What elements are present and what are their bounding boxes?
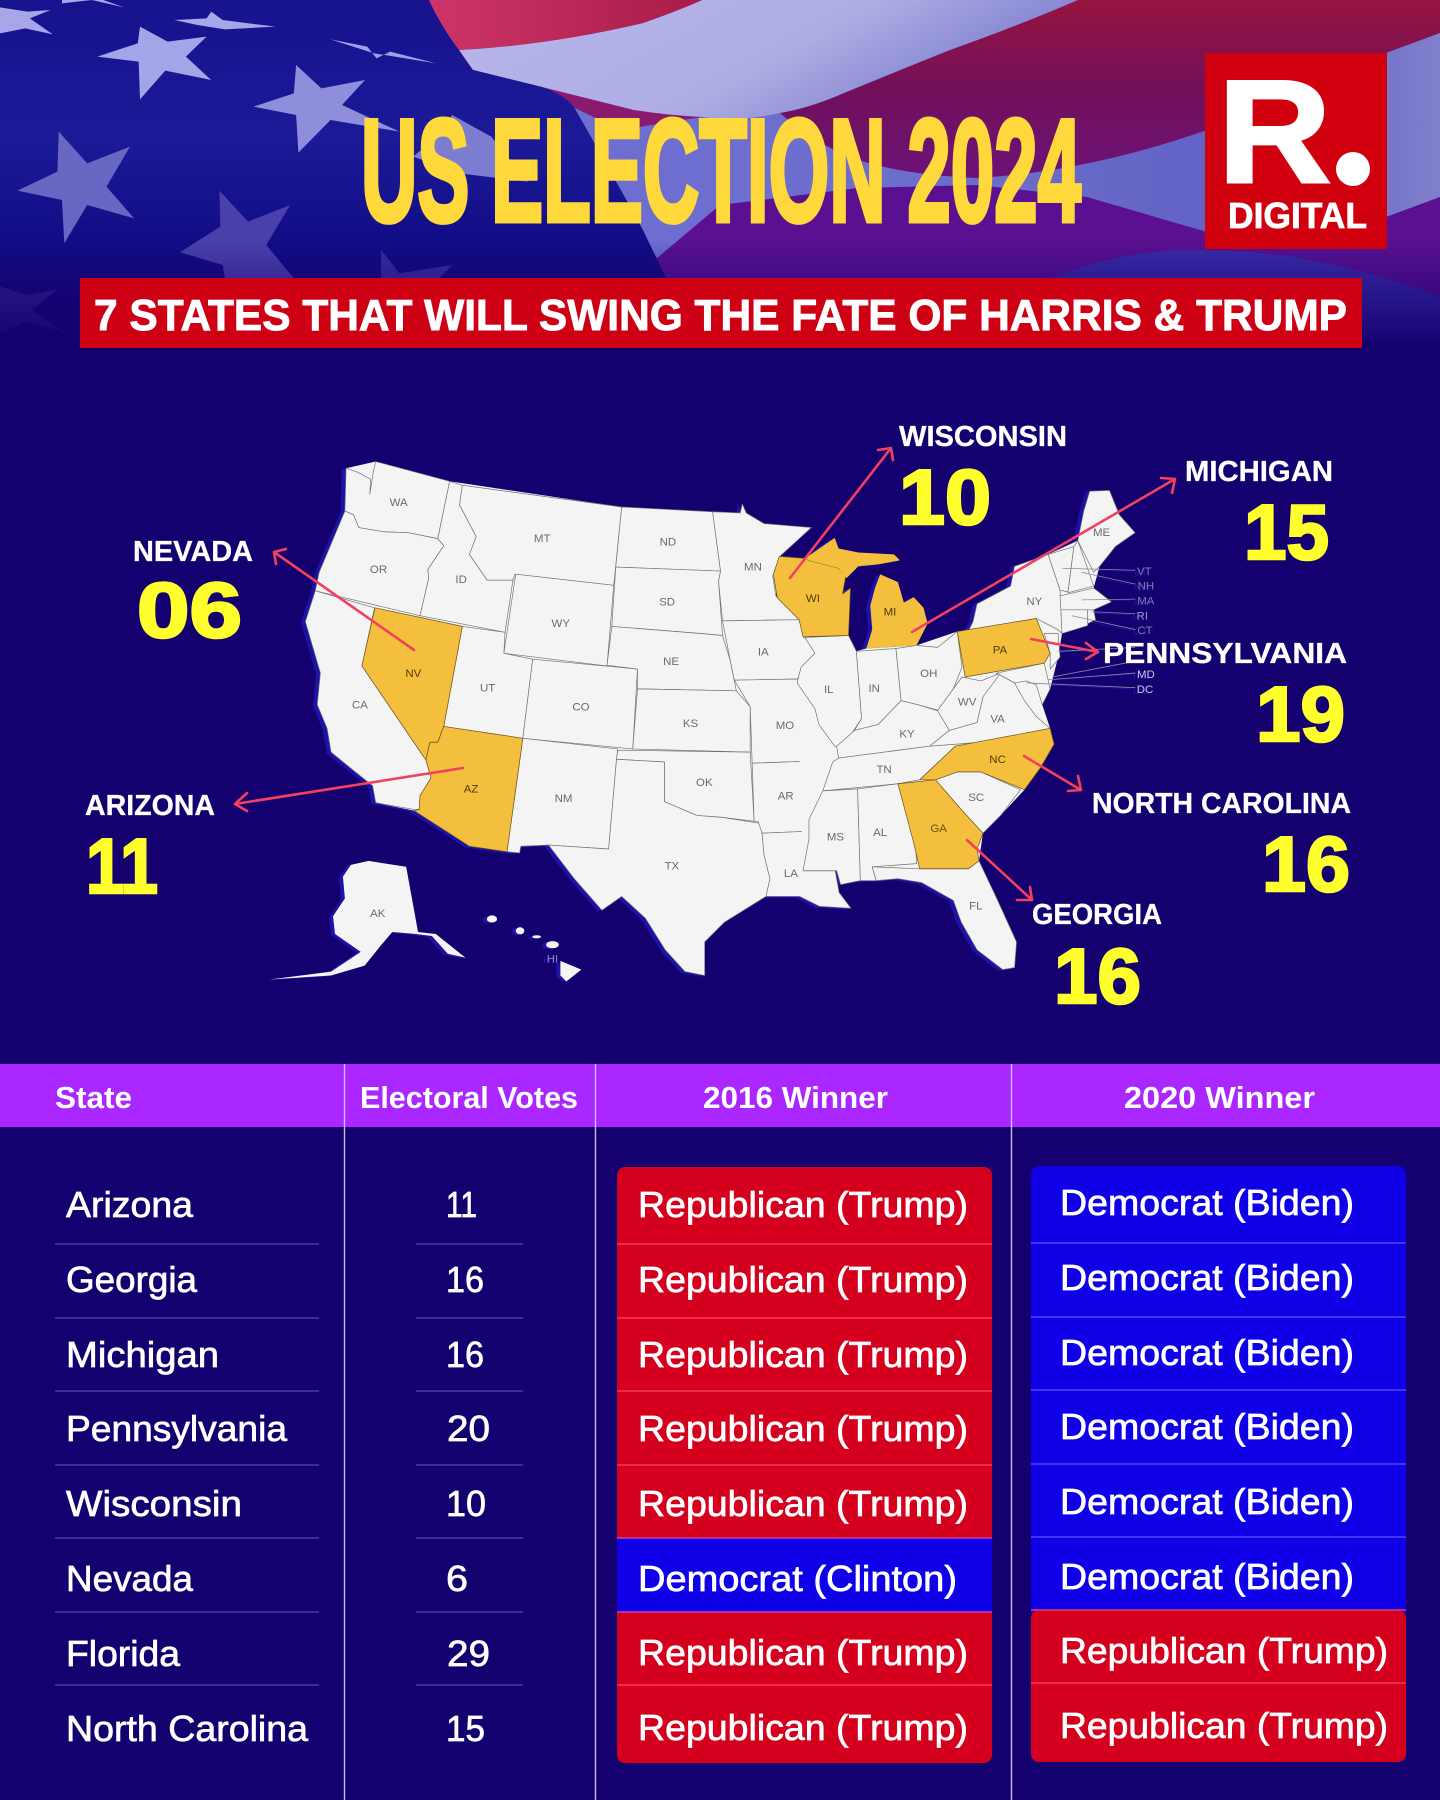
row: North Carolina xyxy=(66,1705,1388,1749)
western state abbreviations: MN xyxy=(744,561,762,573)
callout: Nevada xyxy=(133,536,253,654)
flag banner background xyxy=(0,0,1440,352)
column lines xyxy=(344,1064,1012,1800)
swing state: Arizona xyxy=(414,726,523,852)
callout: Michigan xyxy=(1185,456,1333,576)
arrow: Nevada xyxy=(274,549,414,650)
western state abbreviations: OK xyxy=(696,777,713,789)
row: Michigan xyxy=(66,1332,1354,1375)
eastern state abbreviations: AL xyxy=(873,827,887,839)
US map xyxy=(270,462,1155,981)
row: Michigan: Democrat (Biden) xyxy=(1060,1332,1354,1373)
table xyxy=(0,1064,1440,1800)
swing state: Michigan xyxy=(805,538,928,649)
western state abbreviations: MO xyxy=(776,720,794,732)
canton with stars xyxy=(0,0,680,345)
row: Florida xyxy=(66,1630,1388,1674)
swing state: Nevada xyxy=(362,608,462,760)
western state abbreviations: CA xyxy=(352,700,368,712)
western state abbreviations: WA xyxy=(390,497,408,509)
2016 winner blocks xyxy=(617,1167,992,1763)
row: Wisconsin: Democrat (Biden) xyxy=(1060,1481,1354,1522)
western state abbreviations: WY xyxy=(552,618,570,630)
row: Wisconsin xyxy=(66,1481,1354,1524)
logo: R. Digital: R xyxy=(1218,50,1331,213)
swing state: Georgia xyxy=(898,780,983,869)
row: Arizona: Democrat (Biden) xyxy=(1060,1182,1354,1223)
row: Georgia: Democrat (Biden) xyxy=(1060,1257,1354,1298)
callout: Wisconsin xyxy=(899,421,1067,541)
logo: R. Digital: DIGITAL xyxy=(1228,195,1367,236)
eastern state abbreviations: MD xyxy=(1137,669,1155,681)
row: Pennsylvania: Republican (Trump) xyxy=(638,1408,968,1449)
callout: North Carolina xyxy=(1092,788,1351,908)
callout: Arizona xyxy=(85,790,215,910)
Hawaii xyxy=(487,915,581,981)
row: Florida: Republican (Trump) xyxy=(1060,1630,1388,1671)
callout: Arizona: ARIZONA xyxy=(85,790,215,822)
western state abbreviations: MT xyxy=(534,533,550,545)
eastern state abbreviations: SC xyxy=(968,792,984,804)
row: North Carolina: Republican (Trump) xyxy=(1060,1705,1388,1746)
row: Georgia: 16 xyxy=(446,1259,484,1300)
western state abbreviations: OR xyxy=(370,564,387,576)
row: Georgia: Georgia xyxy=(66,1259,198,1300)
row: Wisconsin: Wisconsin xyxy=(66,1483,242,1524)
row: North Carolina: Republican (Trump) xyxy=(638,1707,968,1748)
eastern state abbreviations: MI xyxy=(884,607,896,619)
arrow: Arizona xyxy=(235,768,463,811)
arrow: Wisconsin xyxy=(790,448,893,578)
eastern state abbreviations: MS xyxy=(827,831,844,843)
callout: Michigan: MICHIGAN xyxy=(1185,456,1333,488)
table header bar: 2020 Winner xyxy=(1124,1080,1315,1115)
row: Arizona: 11 xyxy=(446,1184,477,1225)
eastern state abbreviations: NH xyxy=(1138,581,1154,593)
logo: R. Digital xyxy=(1205,50,1387,249)
western state abbreviations xyxy=(352,497,798,965)
row: Georgia: Republican (Trump) xyxy=(638,1259,968,1300)
eastern state abbreviations: TN xyxy=(876,764,892,776)
table header bar: 2016 Winner xyxy=(703,1080,888,1115)
eastern state abbreviations: DC xyxy=(1137,684,1153,696)
row: Wisconsin: Republican (Trump) xyxy=(638,1483,968,1524)
row: Arizona: Arizona xyxy=(66,1184,194,1225)
western state abbreviations: KS xyxy=(683,718,698,730)
western state abbreviations: CO xyxy=(572,702,590,714)
eastern state abbreviations: IL xyxy=(824,684,834,696)
eastern state abbreviations: WV xyxy=(958,696,977,708)
row: Arizona: Republican (Trump) xyxy=(638,1184,968,1225)
western state abbreviations: NE xyxy=(663,656,679,668)
subtitle banner xyxy=(80,278,1362,348)
row: Florida: 29 xyxy=(447,1633,490,1674)
western state abbreviations: SD xyxy=(659,596,675,608)
eastern state abbreviations: CT xyxy=(1137,625,1153,637)
callout: North Carolina: 16 xyxy=(1262,820,1350,908)
western state abbreviations: UT xyxy=(480,683,495,695)
row: Nevada: 6 xyxy=(446,1558,468,1599)
western state abbreviations: NV xyxy=(405,668,422,680)
western state abbreviations: LA xyxy=(784,868,798,880)
row: Pennsylvania xyxy=(66,1406,1354,1449)
row: Nevada: Democrat (Clinton) xyxy=(638,1558,957,1599)
table header bar: State xyxy=(55,1080,132,1115)
arrow: Georgia xyxy=(967,840,1032,900)
arrow: Pennsylvania xyxy=(1031,639,1098,659)
eastern states xyxy=(773,490,1155,970)
eastern state abbreviations: PA xyxy=(993,644,1008,656)
row: Pennsylvania: Democrat (Biden) xyxy=(1060,1406,1354,1447)
western state abbreviations: AK xyxy=(370,908,386,920)
swing state: Pennsylvania xyxy=(957,618,1050,677)
western state abbreviations: AZ xyxy=(464,783,478,795)
callout: North Carolina: NORTH CAROLINA xyxy=(1092,788,1351,820)
eastern state abbreviations: VT xyxy=(1137,566,1152,578)
row: Pennsylvania: 20 xyxy=(447,1408,490,1449)
swing state: North Carolina xyxy=(920,728,1054,790)
callout: Michigan: 15 xyxy=(1244,488,1329,576)
row dividers xyxy=(55,1244,523,1685)
eastern state abbreviations: RI xyxy=(1137,610,1148,622)
eastern state abbreviations: NY xyxy=(1026,596,1043,608)
row: North Carolina: 15 xyxy=(446,1708,485,1749)
callout: Georgia: GEORGIA xyxy=(1032,899,1162,931)
western state abbreviations: ND xyxy=(660,536,676,548)
row: Wisconsin: 10 xyxy=(446,1483,486,1524)
eastern state abbreviations: KY xyxy=(899,729,915,741)
subtitle banner: 7 STATES THAT WILL SWING THE FATE OF HARRIS & TRUMP xyxy=(94,291,1347,340)
eastern state abbreviations: MA xyxy=(1137,596,1155,608)
eastern state abbreviations: ME xyxy=(1093,527,1111,539)
row: Florida: Republican (Trump) xyxy=(638,1632,968,1673)
callout: Nevada: NEVADA xyxy=(133,536,253,568)
western state abbreviations: ID xyxy=(455,574,467,586)
western state abbreviations: NM xyxy=(555,793,572,805)
callout: Pennsylvania: 19 xyxy=(1256,670,1345,758)
eastern state abbreviations: WI xyxy=(806,593,820,605)
western state abbreviations: AR xyxy=(778,791,794,803)
row: Arizona xyxy=(66,1182,1354,1225)
eastern state abbreviations: FL xyxy=(969,901,983,913)
callout: Pennsylvania: PENNSYLVANIA xyxy=(1103,638,1347,670)
callout: Pennsylvania xyxy=(1103,638,1347,758)
callout: Georgia xyxy=(1032,899,1162,1020)
table header bar: Electoral Votes xyxy=(360,1080,578,1115)
eastern state abbreviations: OH xyxy=(920,668,937,680)
row: North Carolina: North Carolina xyxy=(66,1708,309,1749)
callout: Georgia: 16 xyxy=(1054,932,1141,1020)
callout: Wisconsin: WISCONSIN xyxy=(899,421,1067,453)
row: Michigan: 16 xyxy=(446,1334,484,1375)
swing state: Wisconsin xyxy=(773,556,850,637)
eastern state abbreviations: GA xyxy=(930,823,947,835)
row: Nevada: Democrat (Biden) xyxy=(1060,1556,1354,1597)
row: Michigan: Republican (Trump) xyxy=(638,1334,968,1375)
eastern state abbreviations xyxy=(806,527,1155,913)
western state abbreviations: IA xyxy=(758,646,769,658)
row: Georgia xyxy=(66,1257,1354,1300)
row: Nevada: Nevada xyxy=(66,1558,194,1599)
callout: Wisconsin: 10 xyxy=(899,453,991,541)
small state leader lines xyxy=(1026,568,1135,688)
row: Nevada xyxy=(66,1556,1354,1599)
2020 winner blocks xyxy=(1031,1166,1406,1762)
eastern state abbreviations: NC xyxy=(989,754,1006,766)
table header bar xyxy=(0,1064,1440,1127)
arrow: Michigan xyxy=(912,478,1175,632)
western states xyxy=(270,462,851,981)
row: Pennsylvania: Pennsylvania xyxy=(66,1408,288,1449)
callout: Arizona: 11 xyxy=(86,822,158,910)
arrow: North Carolina xyxy=(1024,756,1081,791)
eastern state abbreviations: IN xyxy=(868,683,880,695)
row: Florida: Florida xyxy=(66,1633,181,1674)
eastern state abbreviations: VA xyxy=(990,713,1005,725)
callout: Nevada: 06 xyxy=(137,566,242,654)
western state abbreviations: HI xyxy=(547,953,558,965)
western state abbreviations: TX xyxy=(665,861,680,873)
row: Michigan: Michigan xyxy=(66,1334,219,1375)
Alaska xyxy=(270,861,465,979)
